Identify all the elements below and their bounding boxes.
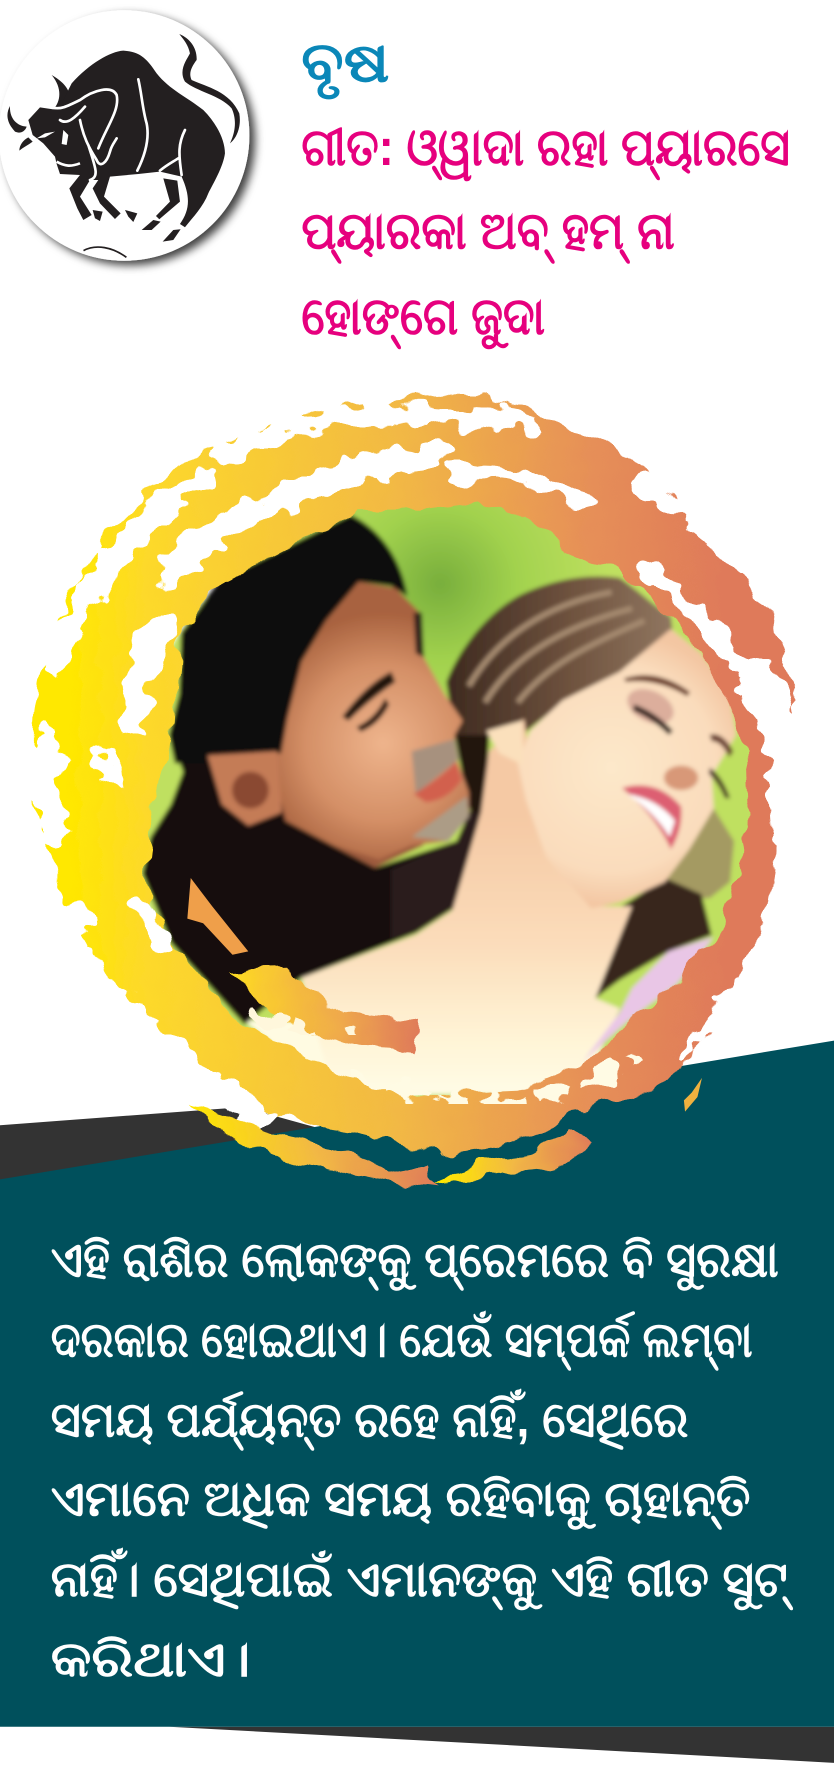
lower photo fill (244, 1021, 612, 1094)
woman's hair lower right, dark (595, 878, 712, 998)
man's face (277, 582, 469, 859)
man's lips (414, 762, 461, 802)
man's neck (277, 776, 424, 868)
bull tail (179, 34, 240, 143)
woman's neck and chest (301, 719, 632, 1094)
cream torn edge under chest (350, 1055, 638, 1099)
text block: description: ଏହି ରାଶିର ଲୋକଙ୍କୁ ପ୍ରେମରେ ବି ସୁରକ୍ଷା (51, 1231, 779, 1291)
bull horn (52, 75, 69, 109)
woman's hair (446, 576, 673, 808)
bull inner hind leg (156, 178, 180, 219)
text block: description: କରିଥାଏ। (51, 1631, 251, 1687)
icon: taurus zodiac badge (0, 10, 249, 261)
man's sweater and neck shadow (142, 735, 481, 1025)
man's inner ear (232, 772, 269, 808)
text block: description (51, 1231, 793, 1687)
bull eye and mouth (37, 130, 68, 145)
hair dark near jaw (455, 735, 489, 817)
woman's ear (486, 721, 524, 766)
woman's lilac top (583, 937, 714, 1062)
woman's face (518, 629, 736, 908)
woman's teeth (627, 794, 675, 837)
woman's nose shade (664, 766, 698, 790)
bull far horn (7, 106, 27, 133)
bull drawing (7, 34, 240, 242)
dark wedge behind teal panel (0, 1107, 361, 1199)
man's brow (342, 672, 395, 721)
small floating flakes (684, 1078, 702, 1112)
yellow bottom fragment (436, 1133, 590, 1185)
woman's eye shadow (622, 682, 679, 731)
bull hooves (93, 210, 181, 242)
woman's far eye (709, 768, 730, 798)
bull bottom mark (84, 247, 126, 257)
woman's brow (624, 675, 690, 696)
decorative torn ring (34, 397, 795, 1188)
man's stubble (412, 739, 459, 794)
ring body (34, 397, 795, 1155)
bull white contours (137, 79, 185, 175)
white flaked streaks (47, 415, 792, 1111)
woman's hair strands on shoulder (391, 776, 485, 939)
bull body and head (28, 51, 225, 227)
man's far brow (414, 613, 424, 657)
woman's hair light strands (469, 592, 644, 702)
heading: song line 3: ହୋଙ୍ଗେ ଜୁଦା (301, 288, 545, 349)
bottom dark strip (169, 1727, 834, 1763)
photo: couple (130, 490, 759, 1111)
text block: description: ସମୟ ପର୍ଯ୍ୟନ୍ତ ରହେ ନାହିଁ, ସେଥିରେ (51, 1387, 688, 1452)
lower left outer fragment (186, 1104, 441, 1188)
bull chin line (57, 162, 80, 166)
cream flecks over tongue (251, 1010, 367, 1032)
panel: teal text background (0, 1041, 834, 1727)
man's eye (357, 698, 389, 732)
man's ear (208, 751, 282, 826)
text block: description: ଏମାନେ ଅଧିକ ସମୟ ରହିବାକୁ ଚାହାନ୍ତି (51, 1471, 750, 1531)
shoulder orange sliver (187, 878, 248, 955)
text block: description: ନାହିଁ। ସେଥିପାଇଁ ଏମାନଙ୍କୁ ଏହି ଗୀତ ସୁଟ୍ (51, 1547, 793, 1611)
bull neck contours (52, 90, 117, 180)
man's hair (169, 515, 408, 764)
woman's lips (622, 785, 681, 849)
man's chin stubble (412, 796, 469, 841)
woman's eyelash (633, 704, 673, 735)
badge circle (0, 10, 249, 261)
photo greenery (130, 490, 759, 1111)
bull lower horn (19, 137, 33, 151)
woman's hair lower right, olive (665, 808, 734, 898)
woman's far brow (710, 734, 733, 757)
text block: description: ଦରକାର ହୋଇଥାଏ। ଯେଉଁ ସମ୍ପର୍କ ଲମ୍ବା (51, 1310, 753, 1372)
heading: song line 2: ପ୍ୟାରକା ଅବ୍ ହମ୍ ନା (301, 202, 675, 263)
inner ring tongue (228, 967, 415, 1053)
heading: zodiac sign: ବୃଷ (301, 30, 389, 99)
